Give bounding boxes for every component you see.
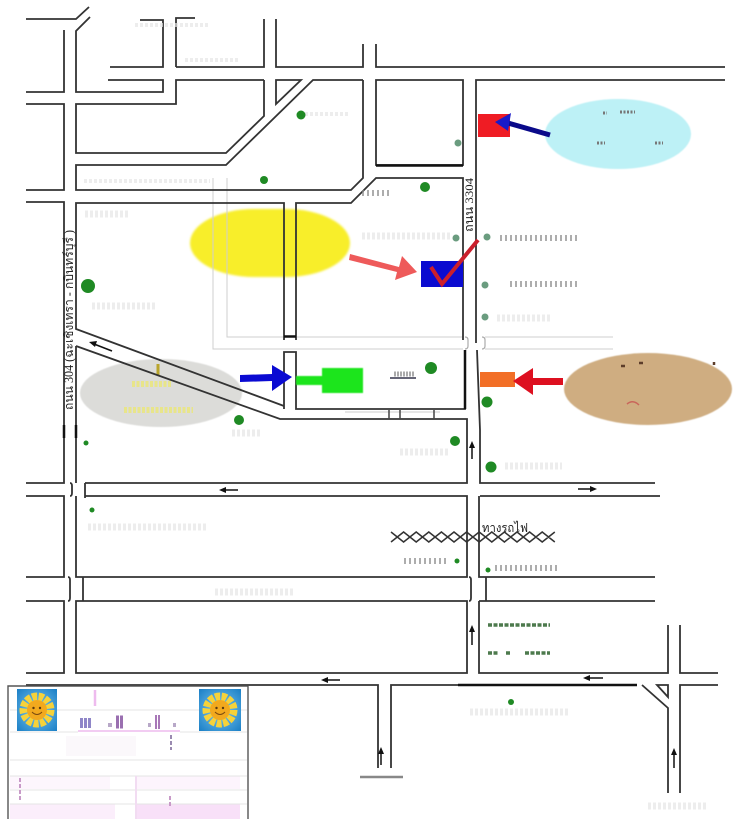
icon: sun right (199, 689, 241, 731)
marker: orange building (480, 372, 515, 387)
bottom road marker (360, 776, 403, 778)
label: railway: ทางรถไฟ (482, 521, 528, 535)
arrow: navy to red building (495, 113, 550, 135)
junction marks (345, 411, 440, 413)
label: highway 304: ถนน 304 (ฉะเชิงเทรา - กบินทร์บุรี ) (62, 230, 77, 410)
icon: sun left (17, 689, 57, 731)
marker: blue building (421, 261, 463, 287)
railway track (391, 532, 555, 542)
blob: light blue zone (545, 99, 691, 169)
blob: yellow zone (190, 209, 350, 277)
legend title smudge (20, 690, 180, 819)
marker: red building (478, 114, 510, 137)
arrow: blue to green building (240, 365, 292, 391)
arrow: salmon to blue building (349, 254, 417, 280)
direction arrows (89, 341, 677, 768)
marker: green building (296, 368, 363, 393)
illegible place names, green (488, 625, 550, 653)
legend pink rows (10, 776, 240, 819)
illegible place names, dark (362, 193, 580, 568)
thick road accents (64, 166, 637, 685)
panel: legend box (8, 685, 248, 819)
arrow: red to orange building (513, 368, 563, 395)
check mark (431, 240, 478, 284)
blob: grey zone (80, 359, 242, 427)
label: highway 3304: ถนน 3304 (462, 178, 476, 232)
building label (390, 377, 416, 379)
landmark dots (81, 110, 514, 705)
faint grey old road outline (213, 178, 613, 349)
blob: tan zone (564, 353, 732, 425)
